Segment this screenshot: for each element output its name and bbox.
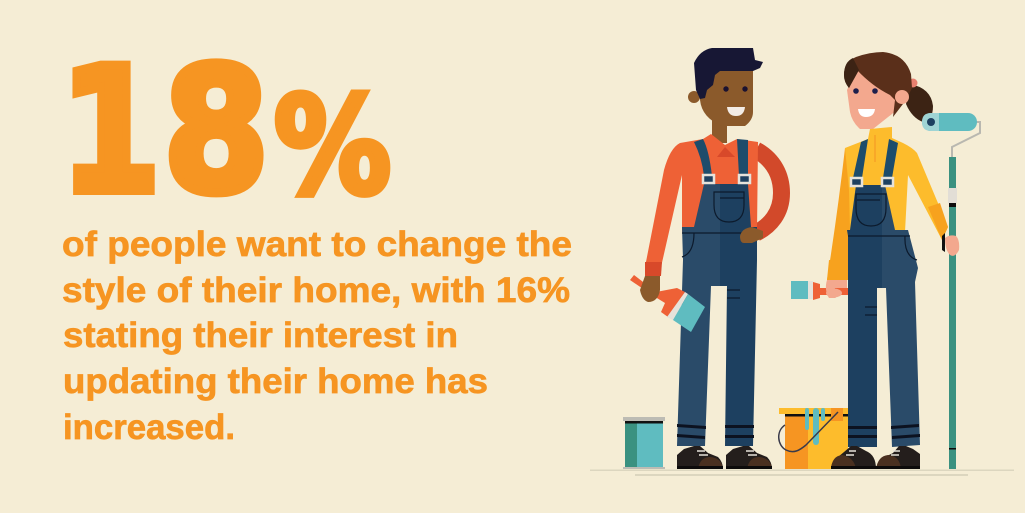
figure: man in overalls	[630, 48, 782, 469]
body text: increased.	[63, 408, 235, 447]
man: pockets and seams	[682, 192, 745, 298]
body text: of people want to change the	[62, 225, 572, 264]
woman: overall straps	[853, 139, 898, 178]
woman: forearm	[928, 203, 948, 240]
woman: hand on roller pole	[942, 233, 959, 256]
man: shirt cuff	[645, 262, 662, 276]
paint can: teal	[623, 417, 665, 469]
woman: hair	[844, 52, 912, 117]
man: collar shadow	[717, 147, 735, 157]
headline statistic: 18%: %	[274, 68, 391, 224]
woman: hair shadow	[844, 58, 859, 88]
woman: trousers, lighter half	[882, 185, 920, 447]
paint bucket: yellow and orange	[779, 408, 848, 469]
woman: shoes	[831, 446, 920, 469]
woman: ear	[895, 90, 909, 104]
man: shirt and near arm	[645, 134, 758, 267]
man: far arm, dark red	[756, 150, 782, 233]
woman: sweater with turtleneck and arm	[845, 127, 948, 240]
man: eyes and smile	[723, 86, 748, 116]
body text: updating their home has	[63, 362, 488, 401]
man: hand on hip	[740, 227, 763, 243]
woman: buckles	[851, 178, 893, 186]
body text: style of their home, with 16%	[62, 271, 570, 310]
woman: forearm and hand	[826, 260, 848, 298]
woman: sweater zip	[874, 135, 876, 162]
figure: woman in overalls	[791, 52, 980, 469]
body text: stating their interest in	[63, 316, 458, 355]
woman: ponytail	[906, 84, 933, 122]
woman: face	[847, 68, 897, 129]
man: cuff stripes	[677, 424, 754, 439]
man: hair	[694, 48, 763, 99]
woman: rear arm, orange	[827, 148, 853, 280]
man: buckles	[703, 175, 750, 183]
headline statistic: 18%: 1	[60, 30, 161, 232]
woman: trousers, darker half	[847, 185, 882, 447]
ground lines	[590, 470, 1014, 476]
man: shoes	[677, 446, 772, 469]
man: neck and head	[688, 68, 753, 143]
woman: roller	[922, 113, 980, 469]
headline statistic: 18%: 8	[163, 30, 269, 232]
woman: cuff stripes	[848, 424, 920, 439]
man: trousers, darker half	[720, 184, 757, 446]
woman: paintbrush	[791, 281, 848, 300]
man: paintbrush	[630, 275, 705, 332]
man: overall straps	[694, 139, 748, 176]
body text	[62, 225, 572, 447]
woman: hair tie	[908, 78, 918, 88]
woman: eyes and smile	[853, 88, 878, 117]
woman: pockets and seams	[848, 194, 917, 315]
man: hand holding brush	[640, 276, 660, 302]
man: trousers, lighter half	[677, 184, 720, 446]
headline statistic: 18%	[60, 30, 391, 232]
